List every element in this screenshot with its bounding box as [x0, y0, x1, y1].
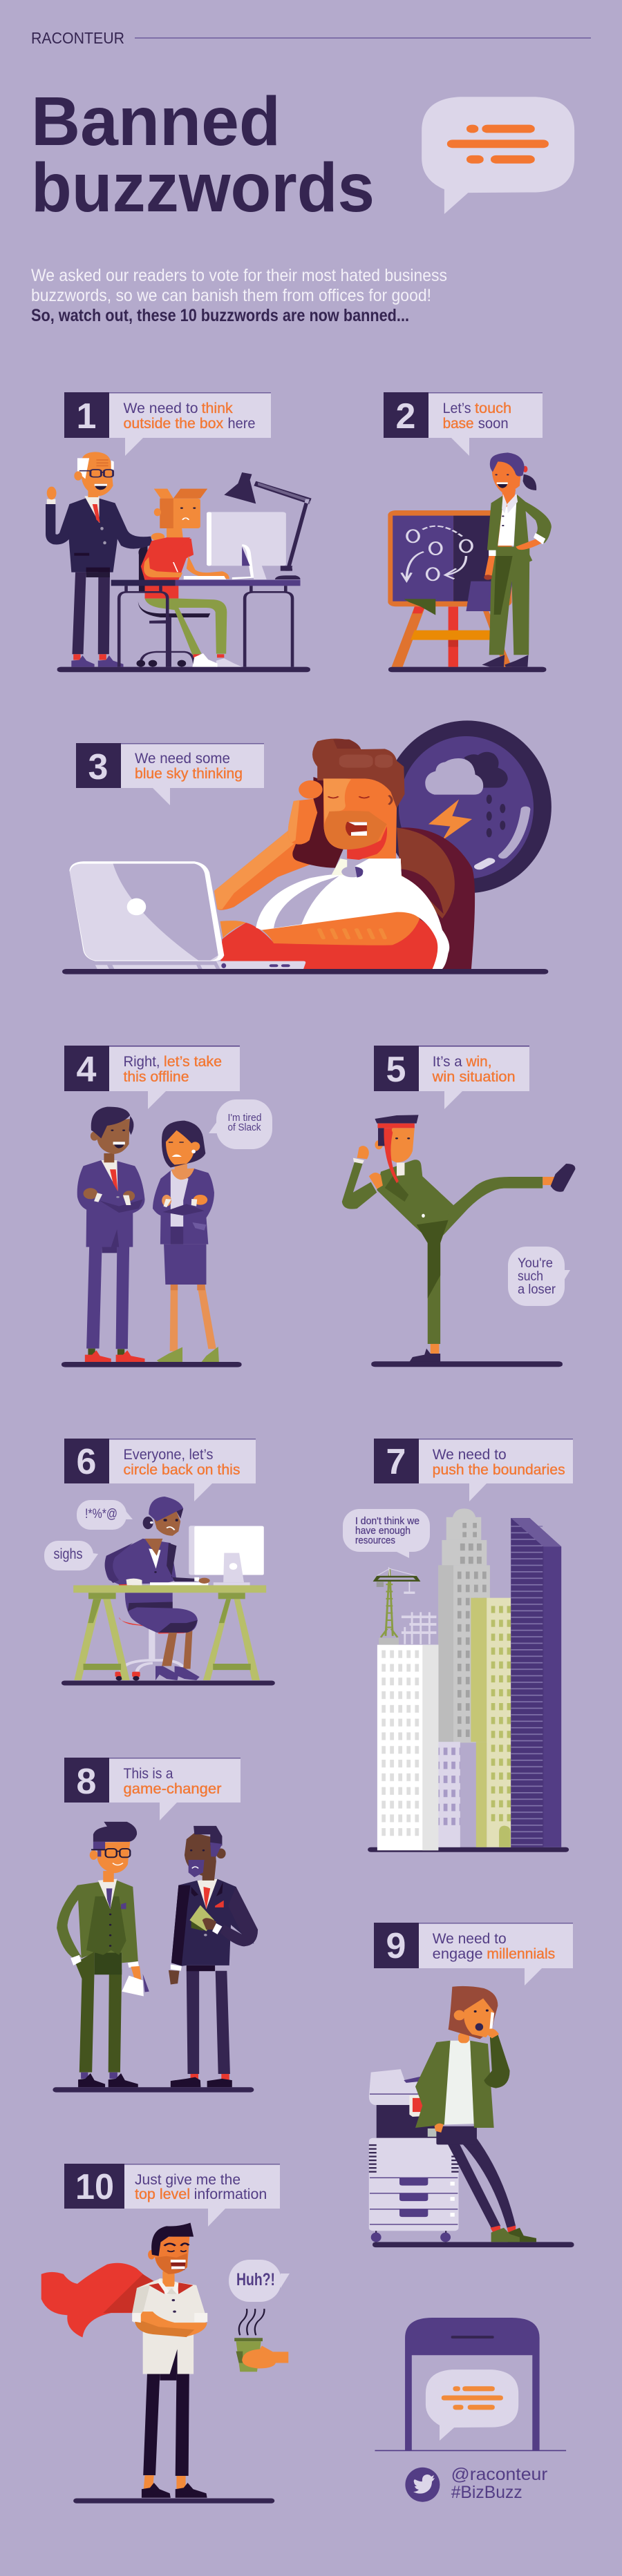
speech bubble: resources: have enough	[355, 1525, 411, 1537]
speech bubble: resources: resources	[355, 1535, 395, 1546]
speech card 2: Let’s	[443, 401, 471, 416]
panel: buzzword 2	[384, 392, 552, 672]
speech bubble: tired of Slack	[209, 1099, 272, 1149]
speech card 1: 1	[77, 396, 96, 436]
speech card 8	[64, 1758, 241, 1820]
speech card 10: information	[194, 2186, 267, 2202]
speech card 6: Everyone, let’s	[123, 1447, 213, 1463]
panel: buzzword 7	[343, 1439, 573, 1852]
speech card 6: 6	[77, 1442, 96, 1482]
speech card 1: outside the box	[123, 416, 224, 432]
intro text	[31, 266, 447, 325]
speech card 9: 9	[386, 1926, 406, 1966]
speech bubble: sighs	[44, 1541, 98, 1570]
illustration: two businessmen talking	[53, 1822, 258, 2093]
speech card 2	[384, 392, 543, 456]
speech card 4: let’s take	[164, 1054, 222, 1070]
illustration: woman on phone leaning on printer	[369, 1986, 574, 2247]
panel: buzzword 9	[369, 1923, 574, 2247]
speech bubble: Huh?!	[229, 2260, 290, 2302]
speech bubble: sighs: sighs	[54, 1546, 83, 1562]
speech card 3: blue sky thinking	[135, 766, 243, 782]
speech card 1: We need to	[123, 401, 198, 416]
speech card 9: engage	[433, 1946, 483, 1962]
speech card 5: win situation	[432, 1069, 516, 1085]
illustration: frustrated woman at desk	[62, 1497, 275, 1686]
speech card 4	[64, 1046, 240, 1109]
speech card 9: We need to	[433, 1931, 507, 1947]
speech card 6	[64, 1439, 256, 1501]
panel: footer phone and social	[375, 2318, 566, 2502]
speech card 10: 10	[75, 2167, 114, 2207]
speech card 9	[374, 1923, 573, 1986]
icon: twitter bird	[405, 2468, 440, 2502]
title: buzzwords	[31, 149, 375, 227]
illustration: man in cape with coffee	[41, 2223, 288, 2503]
speech bubble: swearing	[77, 1500, 133, 1530]
intro text: buzzwords, so we can banish them from offices for good!	[31, 286, 431, 305]
panel: buzzword 4	[62, 1046, 575, 1367]
speech bubble: tired of Slack: I'm tired	[228, 1112, 261, 1124]
speech card 10	[64, 2164, 280, 2227]
social handles: #BizBuzz	[451, 2483, 522, 2502]
speech card 5: It’s a	[433, 1054, 462, 1070]
speech card 1: here	[228, 416, 256, 432]
speech card 5: win,	[466, 1054, 492, 1070]
panel: buzzword 1	[46, 392, 313, 672]
icon: hero speech bubble	[422, 97, 574, 214]
speech card 6: circle back on this	[123, 1462, 241, 1478]
intro text: We asked our readers to vote for their most hated business	[31, 266, 447, 285]
icon: phone with speech bubble	[375, 2318, 566, 2451]
title	[31, 83, 375, 227]
illustration: man and woman with crossed arms	[62, 1107, 575, 1367]
social handles: @raconteur	[451, 2465, 547, 2484]
illustration: man on phone at laptop with storm cloud	[62, 720, 552, 974]
speech card 2: base	[443, 416, 474, 432]
panel: buzzword 8	[53, 1758, 258, 2093]
speech card 4: Right,	[123, 1054, 160, 1070]
speech card 10: Just give me the	[135, 2172, 241, 2188]
speech bubble: you're such a loser: a loser	[518, 1282, 556, 1297]
title: Banned	[31, 83, 281, 160]
speech bubble: you're such a loser: such	[518, 1269, 543, 1284]
panel: buzzword 5	[374, 1046, 570, 1306]
speech bubble: resources	[343, 1509, 430, 1558]
illustration: woman at tactics board	[388, 452, 552, 672]
speech card 2: soon	[478, 416, 509, 432]
intro text: So, watch out, these 10 buzzwords are now banned...	[31, 306, 409, 325]
panel: buzzword 10	[41, 2164, 290, 2503]
speech card 1: think	[202, 401, 233, 416]
panel: buzzword 3	[62, 720, 552, 974]
speech card 2: touch	[475, 401, 511, 416]
speech bubble: tired of Slack: of Slack	[228, 1122, 261, 1133]
speech card 3	[76, 743, 264, 805]
illustration: city skyline under construction	[368, 1508, 569, 1852]
speech card 7	[374, 1439, 573, 1501]
speech card 3: 3	[88, 747, 108, 787]
speech card 9: millennials	[487, 1946, 555, 1962]
speech bubble: Huh?!: Huh?!	[236, 2270, 275, 2289]
speech card 8: This is a	[123, 1766, 173, 1782]
speech bubble: swearing: !*%*@	[85, 1507, 117, 1521]
panel: buzzword 6	[44, 1439, 275, 1686]
speech bubble: you're such a loser: You're	[518, 1256, 553, 1271]
speech card 8: 8	[77, 1762, 96, 1802]
speech card 5: 5	[386, 1050, 406, 1090]
speech card 8: game-changer	[123, 1781, 221, 1797]
speech card 5	[374, 1046, 529, 1109]
speech card 4: 4	[77, 1050, 97, 1090]
speech card 4: this offline	[123, 1069, 189, 1085]
speech card 7: push the boundaries	[433, 1462, 565, 1478]
speech card 1	[64, 392, 271, 456]
speech card 7: 7	[386, 1442, 406, 1482]
speech card 2: 2	[396, 396, 415, 436]
speech card 7: We need to	[433, 1447, 507, 1463]
speech card 3: We need some	[135, 751, 230, 767]
speech bubble: resources: I don't think we	[355, 1515, 420, 1527]
illustration: boss and boxed-in employee	[46, 452, 313, 672]
social handles	[451, 2465, 547, 2502]
speech bubble: you're such a loser	[508, 1247, 570, 1306]
speech card 10: top level	[135, 2186, 190, 2202]
header logo: RACONTEUR	[31, 29, 124, 47]
